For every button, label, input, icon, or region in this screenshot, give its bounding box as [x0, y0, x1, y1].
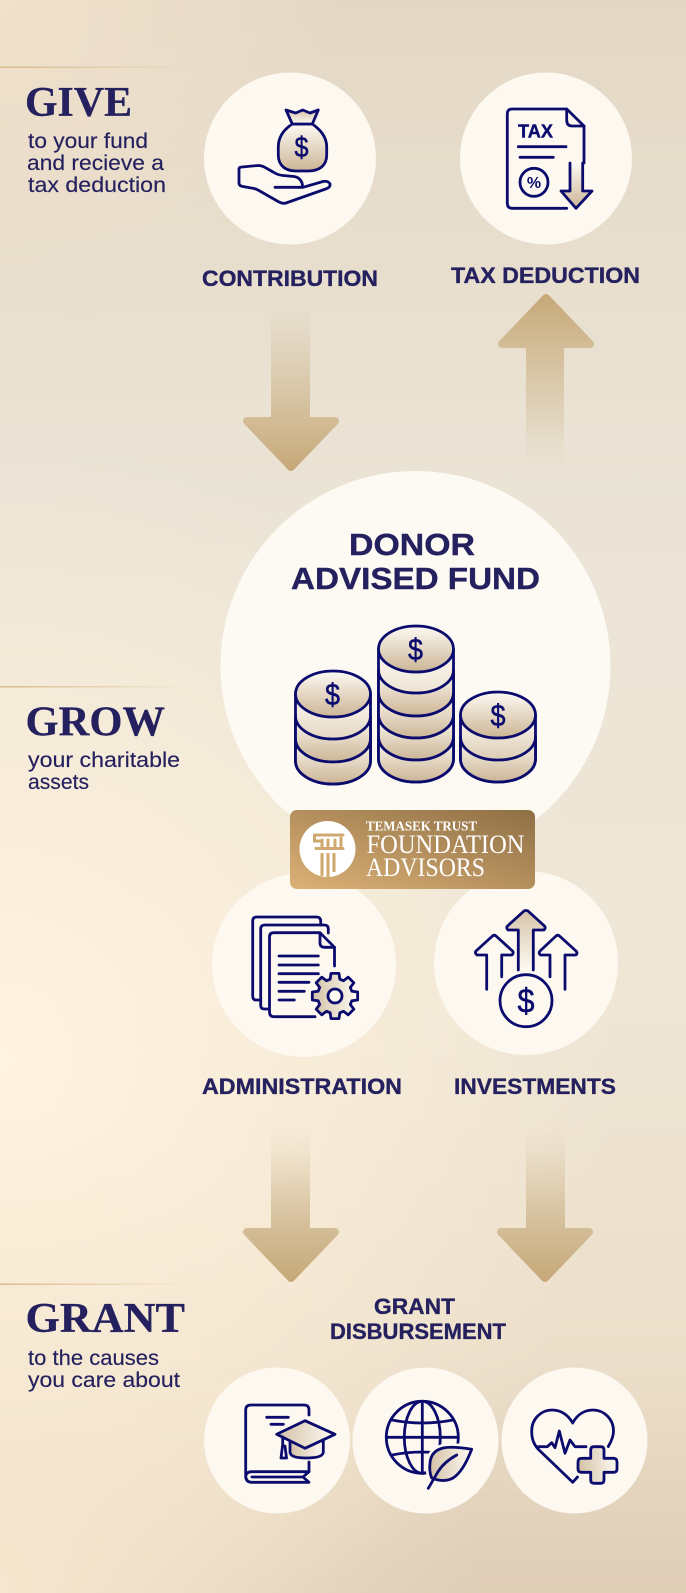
circle: tax deduction [460, 72, 632, 244]
text: grant description [28, 1347, 180, 1392]
icon: arrows rising from coin [475, 910, 577, 1027]
label: contribution: CONTRIBUTION [202, 266, 378, 291]
heading: donor advised fund [291, 527, 540, 596]
label: administration: ADMINISTRATION [202, 1074, 402, 1099]
heading: GIVE: GIVE [25, 80, 132, 126]
icon: coin stacks: $ [408, 632, 423, 667]
icon: tax document: TAX [518, 121, 553, 141]
logo badge: Temasek Trust Foundation Advisors [290, 810, 535, 889]
text: give description: tax deduction [28, 174, 166, 197]
icon: coin stacks: $ [325, 677, 340, 712]
icon: tax document: % [527, 175, 541, 192]
logo text [366, 820, 525, 882]
circle: health [502, 1368, 648, 1514]
circle: administration [212, 873, 396, 1057]
arrow: contribution down to fund [247, 300, 335, 467]
panel: grow text [26, 700, 180, 794]
icon: tax document [507, 109, 592, 208]
icon: money bag in hand [239, 110, 330, 203]
heading: GROW: GROW [26, 700, 165, 746]
icon: globe and leaf [386, 1401, 472, 1488]
panel: administration [202, 873, 402, 1099]
panel: give text [25, 80, 166, 197]
logo text: FOUNDATION [366, 830, 525, 859]
circle: environment [352, 1368, 498, 1514]
panel: contribution [202, 72, 378, 291]
arrow: investments down to grants [501, 1125, 589, 1278]
logo text: TEMASEK TRUST [366, 820, 478, 835]
label: investments: INVESTMENTS [454, 1074, 616, 1099]
text: grow description: your charitable [28, 749, 180, 772]
text: grant description: you care about [28, 1369, 180, 1392]
logo mark: column [300, 821, 356, 877]
text: grant description: to the causes [28, 1347, 159, 1370]
icon: money bag in hand: $ [294, 132, 308, 164]
text: grow description: assets [28, 771, 89, 794]
icon: coin stacks: $ [490, 698, 506, 733]
heading: grant disbursement [330, 1294, 507, 1344]
heading: donor advised fund: DONOR [349, 527, 475, 562]
label: tax deduction: TAX DEDUCTION [451, 263, 640, 288]
panel: investments [434, 871, 618, 1099]
heading: grant disbursement: DISBURSEMENT [330, 1319, 507, 1344]
panel: grant text [26, 1296, 185, 1392]
heading: grant disbursement: GRANT [374, 1294, 456, 1319]
circle: investments [434, 871, 618, 1055]
icon: arrows rising from coin: $ [518, 982, 535, 1020]
logo text: ADVISORS [366, 853, 485, 882]
panel: environment cause [352, 1368, 498, 1514]
coin stack: middle [378, 626, 454, 782]
icon: documents and gear [253, 917, 358, 1019]
panel: donor advised fund [220, 471, 610, 861]
icon: book and graduation cap [246, 1405, 335, 1482]
circle: education [204, 1368, 350, 1514]
circle: donor advised fund [220, 471, 610, 861]
panel: health cause [502, 1368, 648, 1514]
arrow: fund up to tax deduction [502, 298, 590, 472]
coin stack: right [460, 692, 536, 782]
heading: GRANT: GRANT [26, 1296, 185, 1342]
icon: heart with pulse and cross [532, 1410, 617, 1483]
text: give description [27, 130, 166, 197]
icon: coin stacks [296, 626, 536, 784]
text: give description: and recieve a [27, 152, 164, 175]
coin stack: left [296, 671, 370, 784]
heading: donor advised fund: ADVISED FUND [291, 561, 540, 596]
panel: tax deduction [451, 72, 640, 288]
arrow: administration down to grants [247, 1125, 335, 1278]
panel: education cause [204, 1368, 350, 1514]
circle: contribution [204, 72, 376, 244]
icon: gear [312, 973, 358, 1019]
text: grow description [28, 749, 180, 794]
text: give description: to your fund [28, 130, 148, 153]
